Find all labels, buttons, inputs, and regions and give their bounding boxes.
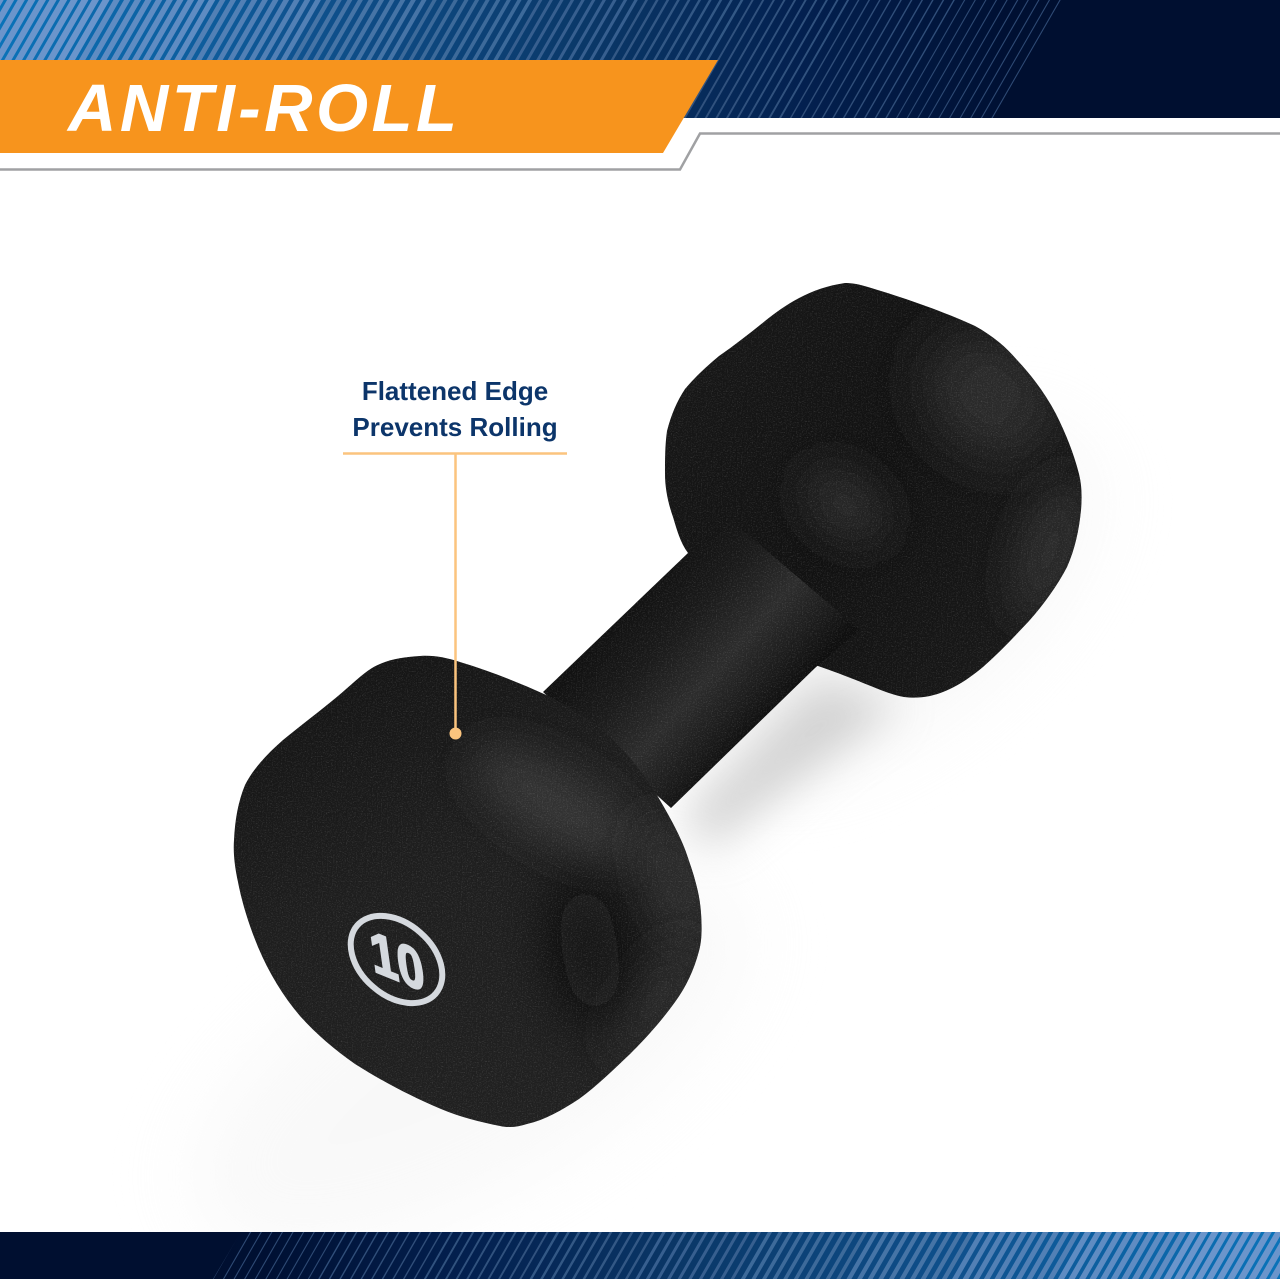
header band [0,0,1280,128]
callout rule and pointer [343,454,567,733]
weight number badge [334,898,459,1021]
callout: flattened edge: Prevents Rolling [352,412,558,442]
orange title banner [0,60,718,153]
callout: flattened edge [343,376,567,740]
weight number badge: 10 [366,917,429,1005]
footer band [0,1232,1280,1279]
header outline stroke [0,134,1280,170]
surface grain [225,275,1090,1135]
title: ANTI-ROLL [66,71,460,146]
callout label: Flattened Edge [362,376,548,406]
handle [543,517,860,808]
front weight head [234,656,720,1127]
back weight head [665,283,1100,698]
dumbbell product image [137,275,1147,1279]
floor shadow [137,368,1147,1279]
